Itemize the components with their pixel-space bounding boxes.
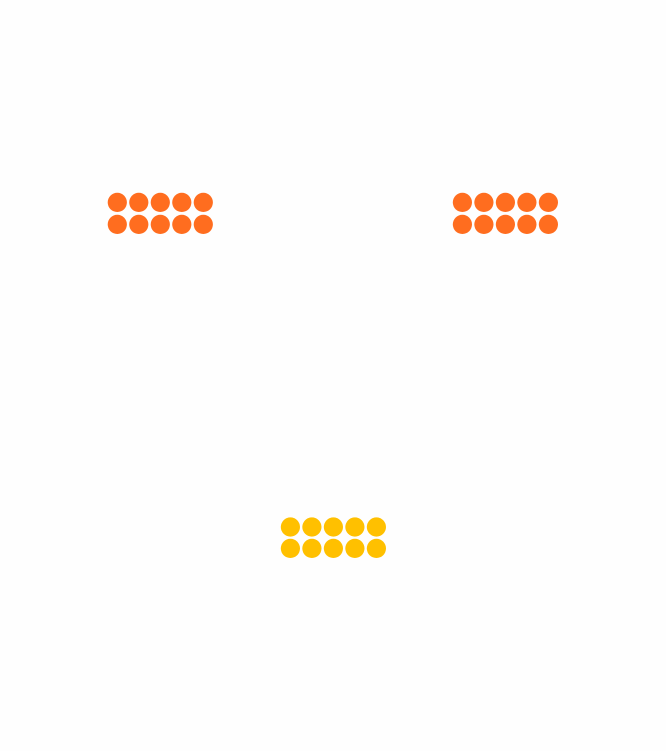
dot group: top left orange [108,193,213,234]
dot group: top right orange [453,193,558,234]
dot group: bottom center yellow [281,517,386,558]
